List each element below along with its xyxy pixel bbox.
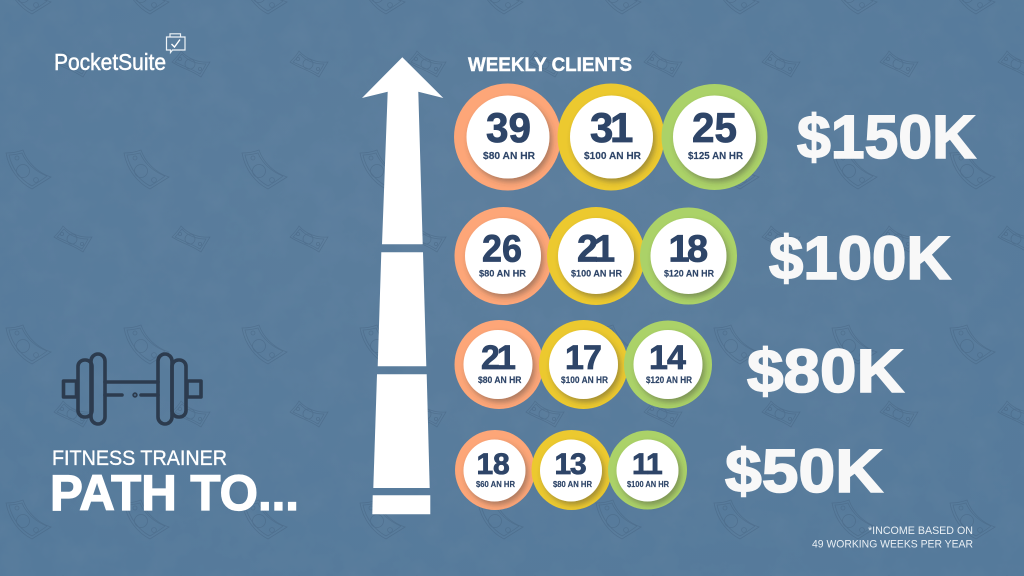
badge: 14 at $120 an hr <box>624 320 712 408</box>
badge: 11 at $100 an hr: $100 AN HR <box>627 480 669 489</box>
badge: 18 at $60 an hr <box>455 430 535 510</box>
badge: 21 at $80 an hr: 21 <box>481 339 516 377</box>
logo: PocketSuite <box>54 34 185 75</box>
badge: 13 at $80 an hr <box>532 430 612 510</box>
row: $100K <box>454 207 951 305</box>
badge: 21 at $100 an hr: 21 <box>577 228 615 270</box>
badge: 18 at $60 an hr: $60 AN HR <box>476 480 515 489</box>
salary: $80K: $80K <box>747 337 904 405</box>
subtitle: fitness trainer: FITNESS TRAINER <box>52 447 227 470</box>
badge: 17 at $100 an hr <box>539 320 628 409</box>
badge: 18 at $120 an hr: $120 AN HR <box>664 268 714 280</box>
badge: 25 at $125 an hr: 25 <box>692 104 737 151</box>
row: $80K <box>454 320 904 409</box>
icon: dumbbell <box>64 354 201 424</box>
badge: 18 at $120 an hr <box>640 208 737 304</box>
row: $150K <box>454 84 976 190</box>
footnote: *INCOME BASED ON <box>868 525 973 537</box>
badge: 21 at $100 an hr <box>547 207 645 305</box>
badge: 25 at $125 an hr: $125 AN HR <box>688 150 743 162</box>
badge: 11 at $100 an hr <box>608 430 687 510</box>
badge: 18 at $60 an hr: 18 <box>476 448 510 481</box>
badge: 18 at $120 an hr: 18 <box>668 228 708 270</box>
badge: 11 at $100 an hr: 11 <box>632 448 663 481</box>
icon: briefcase with check <box>166 34 185 52</box>
badge: 26 at $80 an hr: $80 AN HR <box>479 268 526 280</box>
badge: 25 at $125 an hr <box>662 84 768 190</box>
logo wordmark: PocketSuite <box>54 49 166 75</box>
badge: 13 at $80 an hr: 13 <box>554 448 587 481</box>
badge: 26 at $80 an hr <box>454 207 552 305</box>
salary: $100K: $100K <box>769 224 951 292</box>
badge: 17 at $100 an hr: $100 AN HR <box>561 375 609 385</box>
badge: 31 at $100 an hr: 31 <box>590 104 633 151</box>
footnote: 49 WORKING WEEKS PER YEAR <box>812 538 973 550</box>
badge: 39 at $80 an hr <box>454 84 561 190</box>
badge: 39 at $80 an hr: 39 <box>486 104 531 151</box>
arrow: rising path <box>362 57 443 514</box>
badge: 39 at $80 an hr: $80 AN HR <box>483 150 535 162</box>
badge: 21 at $100 an hr: $100 AN HR <box>571 268 622 280</box>
footnote <box>812 525 973 550</box>
row: $50K <box>455 430 883 510</box>
badge: 21 at $80 an hr: $80 AN HR <box>478 375 522 385</box>
badge: 21 at $80 an hr <box>454 320 544 409</box>
badge: 14 at $120 an hr: 14 <box>649 339 686 377</box>
title <box>50 447 299 521</box>
salary: $150K: $150K <box>797 103 976 171</box>
heading: weekly clients: WEEKLY CLIENTS <box>468 54 632 76</box>
badge: 13 at $80 an hr: $80 AN HR <box>553 480 592 489</box>
badge: 31 at $100 an hr: $100 AN HR <box>584 150 641 162</box>
badge: 14 at $120 an hr: $120 AN HR <box>646 375 693 385</box>
badge: 31 at $100 an hr <box>558 84 664 190</box>
badge: 26 at $80 an hr: 26 <box>482 228 522 270</box>
salary: $50K: $50K <box>725 437 883 505</box>
heading: path to: PATH TO... <box>50 465 299 521</box>
badge: 17 at $100 an hr: 17 <box>565 339 602 377</box>
